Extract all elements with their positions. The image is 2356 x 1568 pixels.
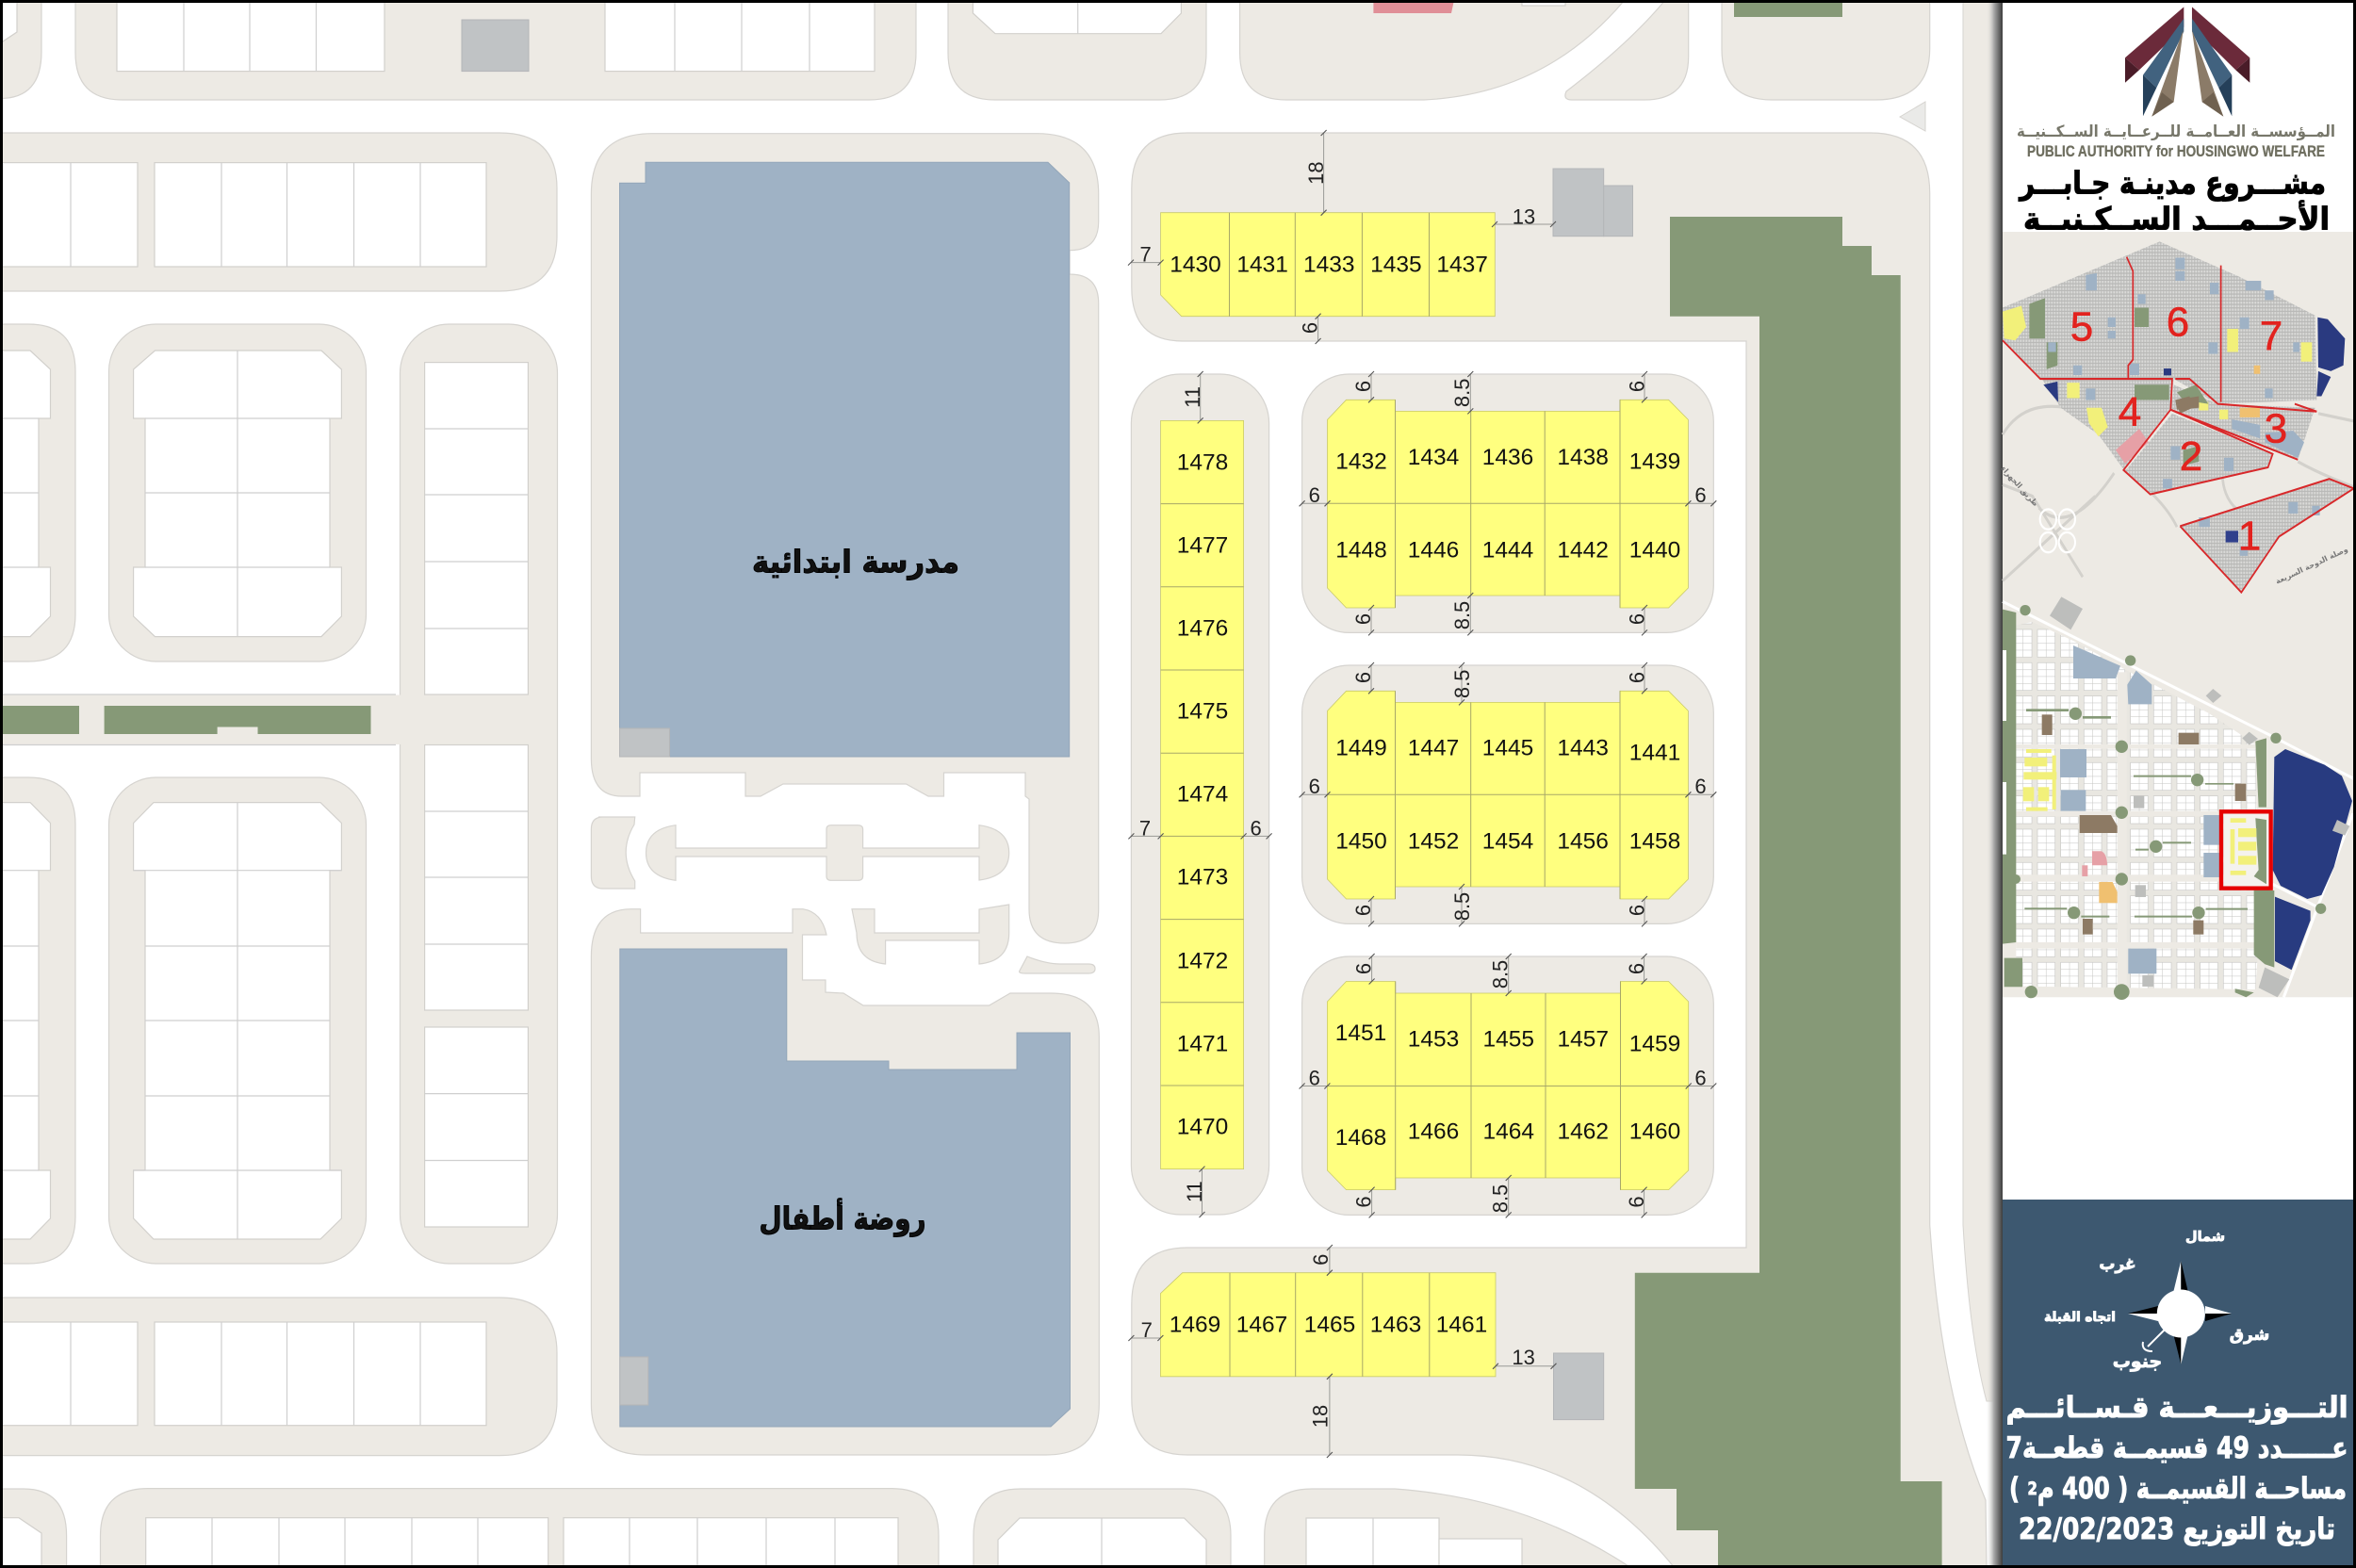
compass direction labels: شرق — [2230, 1326, 2269, 1345]
location map: section plan — [2003, 594, 2356, 1000]
block: lots 1432-1448: 1444 — [1482, 537, 1533, 564]
block: lots 1432-1448: 1438 — [1557, 445, 1609, 470]
green belt — [1635, 217, 1942, 1568]
compass direction labels: اتجاه القبلة — [2044, 1310, 2116, 1325]
key map: seven city sections: 3 — [2265, 405, 2287, 452]
block: lots 1441-1458: 1449 — [1335, 735, 1387, 761]
key map: seven city sections: وصلة الدوحة السريعة — [2274, 545, 2349, 586]
block: lots 1432-1448 — [1302, 374, 1713, 632]
block: column lots 1470-1478: 1478 — [1177, 450, 1228, 475]
setback dimension labels: 6 — [1625, 1196, 1648, 1208]
compass direction labels: جنوب — [2113, 1351, 2162, 1372]
service buildings — [1553, 169, 1632, 1420]
setback dimension lines — [1131, 133, 1713, 1455]
block: column lots 1470-1478: 1475 — [1177, 699, 1228, 724]
panel: elementary school block: مدرسة ابتدائية — [752, 543, 959, 580]
block: lots 1432-1448: 1448 — [1335, 537, 1387, 564]
block: top row lots 1430-1437: 1437 — [1436, 253, 1488, 277]
block: lots 1451-1468: 1451 — [1335, 1021, 1386, 1046]
block: lots 1451-1468: 1453 — [1408, 1027, 1459, 1052]
key map: seven city sections: طريق الجهراء — [2000, 465, 2039, 508]
block: top row lots 1430-1437: 1433 — [1303, 253, 1355, 277]
block: lots 1451-1468: 1462 — [1557, 1119, 1609, 1144]
block: lots 1451-1468: 1464 — [1482, 1119, 1534, 1144]
compass direction labels: غرب — [2099, 1255, 2136, 1274]
block: column lots 1470-1478: 1470 — [1177, 1114, 1228, 1140]
block: lots 1432-1448: 1446 — [1408, 537, 1459, 564]
panel: elementary school block — [591, 134, 1099, 943]
setback dimension labels: 6 — [1625, 905, 1648, 916]
distribution date: تاريخ التوزيع 22/02/2023 — [2019, 1512, 2335, 1546]
setback dimension labels: 8.5 — [1450, 379, 1474, 407]
block: lots 1432-1448: 1439 — [1629, 449, 1680, 475]
setback dimension labels: 6 — [1351, 381, 1375, 392]
block: column lots 1470-1478: 1471 — [1177, 1031, 1228, 1057]
setback dimension labels: 7 — [1139, 816, 1151, 841]
block: bottom row lots 1461-1469: 1467 — [1236, 1312, 1287, 1337]
compass direction labels: شمال — [2185, 1230, 2225, 1245]
block: column lots 1470-1478 — [1131, 374, 1269, 1215]
block: lots 1432-1448: 1434 — [1408, 445, 1459, 470]
setback dimension labels: 6 — [1309, 775, 1320, 798]
icon: housing authority logo — [2125, 7, 2250, 117]
setback dimension labels: 7 — [1141, 1318, 1153, 1342]
block: column lots 1470-1478: 1474 — [1177, 782, 1228, 807]
panel shadow edge — [1987, 0, 2003, 1568]
setback dimension labels: 18 — [1304, 161, 1328, 185]
setback dimension labels: 8.5 — [1450, 892, 1474, 921]
block: column lots 1470-1478: 1473 — [1177, 865, 1228, 890]
block: lots 1432-1448: 1432 — [1335, 449, 1387, 475]
side panel background — [2003, 0, 2356, 1568]
parking islands between schools — [591, 817, 1095, 973]
setback dimension labels: 7 — [1139, 243, 1152, 266]
block: column lots 1470-1478: 1472 — [1177, 948, 1228, 974]
key map: seven city sections: 6 — [2167, 300, 2189, 345]
block: lots 1451-1468: 1468 — [1335, 1125, 1386, 1151]
key map: seven city sections: 5 — [2070, 303, 2093, 351]
block: lots 1441-1458: 1441 — [1629, 741, 1680, 765]
block: lots 1441-1458: 1456 — [1557, 829, 1609, 854]
block: lots 1441-1458: 1447 — [1408, 735, 1459, 761]
block: lots 1432-1448: 1442 — [1557, 537, 1609, 564]
block: lots 1451-1468: 1455 — [1482, 1027, 1534, 1052]
setback dimension labels: 13 — [1512, 1346, 1535, 1369]
setback dimension labels: 8.5 — [1450, 601, 1474, 629]
setback dimension labels: 6 — [1351, 672, 1375, 683]
block: lots 1441-1458: 1452 — [1408, 829, 1459, 854]
setback dimension labels: 6 — [1299, 322, 1321, 334]
block: lots 1441-1458: 1443 — [1557, 735, 1609, 761]
block: column lots 1470-1478: 1477 — [1177, 533, 1228, 558]
project title line two: الأحــمـــد الســكـنيــة — [2023, 200, 2330, 237]
setback dimension labels: 11 — [1181, 386, 1204, 408]
setback dimension labels: 6 — [1625, 672, 1648, 683]
setback dimension labels: 6 — [1625, 613, 1648, 625]
setback dimension labels: 13 — [1513, 205, 1535, 228]
block: lots 1441-1458: 1454 — [1482, 829, 1533, 854]
setback dimension labels: 6 — [1309, 1067, 1320, 1089]
setback dimension labels: 6 — [1351, 905, 1375, 916]
block: lots 1441-1458: 1445 — [1482, 735, 1533, 761]
block: lots 1441-1458 — [1302, 665, 1713, 923]
block: lots 1441-1458: 1458 — [1629, 829, 1680, 854]
setback dimension labels — [1139, 161, 1707, 1428]
block: lots 1451-1468 — [1302, 956, 1713, 1215]
key map: seven city sections: 2 — [2180, 433, 2202, 480]
large surrounding street block — [1132, 133, 1987, 1568]
setback dimension labels: 8.5 — [1450, 670, 1474, 698]
block: lots 1432-1448: 1440 — [1629, 537, 1680, 564]
block: lots 1432-1448: 1436 — [1482, 445, 1533, 470]
block: bottom row lots 1461-1469: 1465 — [1304, 1312, 1355, 1337]
panel: kindergarten block: روضة أطفال — [760, 1199, 925, 1238]
block: bottom row lots 1461-1469 — [1160, 1273, 1496, 1377]
block: column lots 1470-1478: 1476 — [1177, 616, 1228, 641]
setback dimension labels: 6 — [1351, 1196, 1376, 1208]
setback dimension labels: 6 — [1694, 775, 1707, 798]
block: bottom row lots 1461-1469: 1461 — [1436, 1312, 1487, 1337]
panel: kindergarten block — [591, 909, 1099, 1455]
key map: seven city sections: 7 — [2260, 313, 2282, 360]
setback dimension labels: 6 — [1351, 613, 1375, 625]
block: lots 1441-1458: 1450 — [1335, 829, 1387, 854]
east road verge — [1963, 0, 2003, 1401]
block: top row lots 1430-1437: 1431 — [1236, 253, 1288, 277]
block: lots 1451-1468: 1466 — [1408, 1119, 1459, 1144]
setback dimension labels: 18 — [1308, 1405, 1333, 1428]
block: lots 1451-1468: 1457 — [1557, 1027, 1609, 1052]
block: bottom row lots 1461-1469: 1469 — [1170, 1312, 1220, 1337]
key map: seven city sections: 4 — [2119, 389, 2141, 435]
setback dimension labels: 11 — [1183, 1181, 1206, 1202]
setback dimension labels: 6 — [1250, 816, 1262, 841]
panel: distribution info — [2003, 1200, 2356, 1568]
setback dimension labels: 8.5 — [1489, 1184, 1512, 1213]
block: lots 1451-1468: 1459 — [1629, 1031, 1680, 1057]
key map: seven city sections: 1 — [2238, 513, 2261, 560]
setback dimension labels: 6 — [1625, 963, 1648, 974]
block: lots 1451-1468: 1460 — [1629, 1119, 1680, 1144]
map: street blocks left column — [0, 0, 1631, 1568]
setback dimension labels: 6 — [1309, 1254, 1333, 1266]
setback dimension labels: 6 — [1694, 483, 1707, 507]
block: top row lots 1430-1437 — [1161, 213, 1495, 317]
compass direction labels — [2044, 1230, 2269, 1372]
green strip: west park — [0, 706, 371, 734]
setback dimension labels: 6 — [1351, 963, 1376, 974]
setback dimension labels: 8.5 — [1489, 960, 1512, 988]
setback dimension labels: 6 — [1625, 381, 1648, 392]
setback dimension labels: 6 — [1694, 1067, 1707, 1089]
block: top row lots 1430-1437: 1435 — [1370, 253, 1422, 277]
block: top row lots 1430-1437: 1430 — [1170, 253, 1221, 277]
block: bottom row lots 1461-1469: 1463 — [1370, 1312, 1421, 1337]
key map: seven city sections — [2000, 232, 2356, 594]
setback dimension labels: 6 — [1309, 483, 1320, 507]
icon: compass rose — [2128, 1261, 2232, 1364]
map: top street blocks — [948, 0, 1930, 131]
